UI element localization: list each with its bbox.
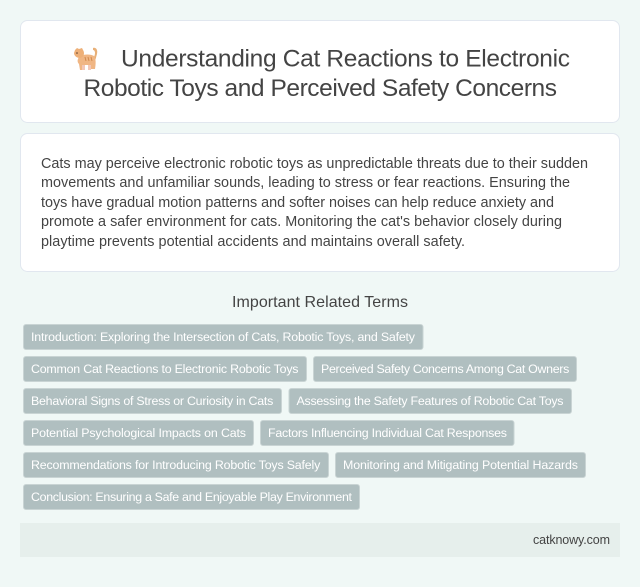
tag: common reactions <box>24 356 306 382</box>
text block: description: Cats may perceive electronic robotic toys as unpredictable threats due to their sudden <box>41 156 588 172</box>
text block: description: toys have gradual motion patterns and softer noises can help reduce anxiety and <box>41 195 554 211</box>
tag: safety features <box>289 388 572 414</box>
heading: related terms: Important Related Terms <box>232 294 408 311</box>
tag: perceived safety: Perceived Safety Concerns Among Cat Owners <box>321 362 569 376</box>
icon: orange cat <box>74 48 97 70</box>
tag: behavioral signs <box>24 388 282 414</box>
footer text: site name: catknowy.com <box>533 533 610 547</box>
tag: introduction <box>24 324 423 350</box>
tag: safety features: Assessing the Safety Features of Robotic Cat Toys <box>296 394 564 408</box>
title: Understanding Cat Reactions to Electronic <box>121 46 570 72</box>
title <box>84 46 570 102</box>
text block: description <box>41 156 588 250</box>
tag: psychological impacts: Potential Psychological Impacts on Cats <box>31 426 246 440</box>
tag: recommendations: Recommendations for Introducing Robotic Toys Safely <box>31 458 321 472</box>
tag: influencing factors: Factors Influencing Individual Cat Responses <box>268 426 507 440</box>
tag: perceived safety <box>314 356 576 382</box>
footer <box>20 523 620 557</box>
tag: common reactions: Common Cat Reactions to Electronic Robotic Toys <box>31 362 298 376</box>
tag: monitoring hazards: Monitoring and Mitigating Potential Hazards <box>343 458 578 472</box>
text block: description: movements and unfamiliar sounds, leading to stress or fear reactions. Ensuring the <box>41 175 570 191</box>
tag: conclusion <box>24 484 360 510</box>
title: Robotic Toys and Perceived Safety Concerns <box>84 75 557 102</box>
tag: monitoring hazards <box>336 452 586 478</box>
tag: influencing factors <box>260 420 514 446</box>
tag: introduction: Introduction: Exploring the Intersection of Cats, Robotic Toys, and Safety <box>31 330 416 344</box>
tag: conclusion: Conclusion: Ensuring a Safe and Enjoyable Play Environment <box>31 490 353 504</box>
text block: description: promote a safer environment for cats. Monitoring the cat's behavior closely during <box>41 214 562 230</box>
tag: behavioral signs: Behavioral Signs of Stress or Curiosity in Cats <box>31 394 273 408</box>
text block: description: playtime prevents potential accidents and maintains overall safety. <box>41 234 465 250</box>
tag: recommendations <box>24 452 328 478</box>
panel: description card <box>20 134 620 272</box>
tag: psychological impacts <box>24 420 254 446</box>
panel: related term tags <box>24 324 586 510</box>
panel: title card <box>20 20 620 122</box>
